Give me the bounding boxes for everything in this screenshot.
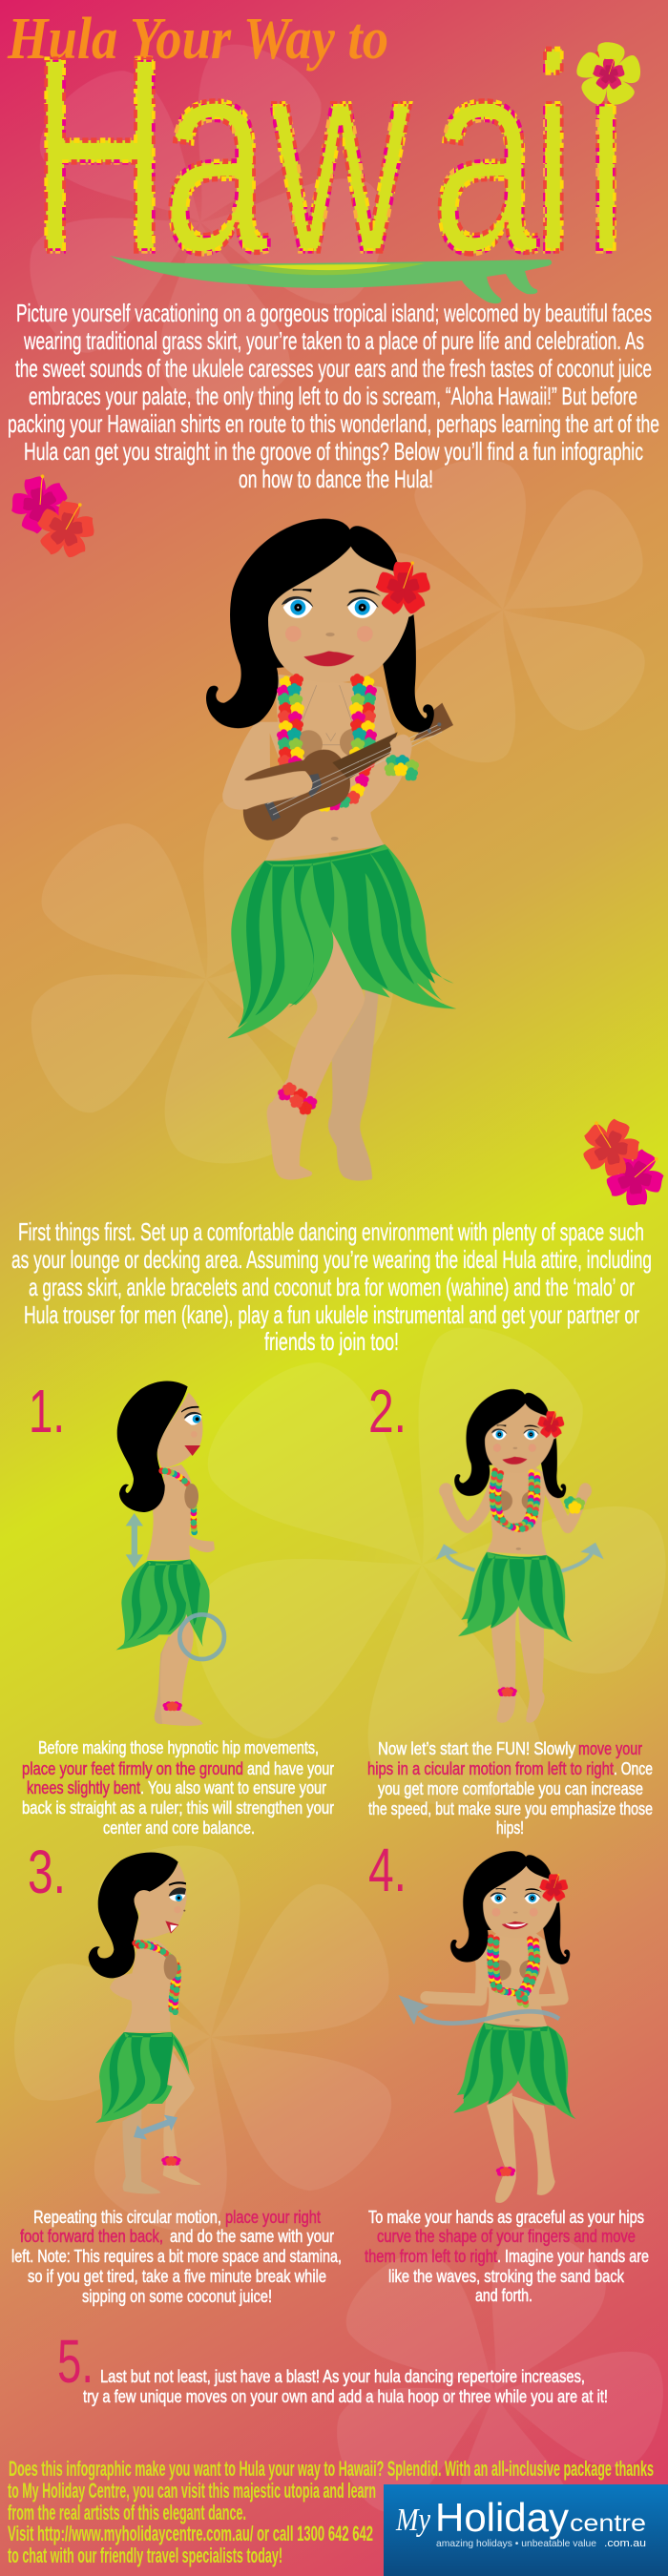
torso and arm xyxy=(110,1940,176,2032)
back leg xyxy=(328,989,379,1181)
step 4 text: them from left to right xyxy=(365,2247,497,2266)
logo: My Holiday Centre: Holiday xyxy=(435,2495,569,2540)
legs xyxy=(487,2092,555,2203)
step 4 text: and forth. xyxy=(475,2286,532,2305)
call to action text: Visit http://www.myholidaycentre.com.au/ or call 1300 642 642 xyxy=(8,2522,373,2545)
coconuts xyxy=(491,1960,540,1981)
call to action text xyxy=(8,2457,654,2567)
figure 3: side view stepping xyxy=(89,1852,201,2194)
arrow: hands left to right xyxy=(398,1995,559,2025)
arrow: up and down xyxy=(126,1513,143,1568)
coconut xyxy=(184,1484,198,1509)
skirt xyxy=(458,1552,573,1642)
step 1 text: back is straight as a ruler; this will strengthen your xyxy=(22,1798,334,1818)
ukulele headstock xyxy=(413,703,453,740)
lei xyxy=(136,1942,178,2012)
skirt xyxy=(95,2032,189,2123)
torso xyxy=(146,1465,194,1560)
paragraph: first things first xyxy=(11,1217,652,1356)
step 2 text: hips! xyxy=(496,1818,524,1838)
lei xyxy=(277,674,377,812)
grass skirt xyxy=(227,844,456,1038)
forearm xyxy=(233,771,312,809)
anklet xyxy=(278,1082,317,1114)
title: Hula Your Way to: Hula Your Way to xyxy=(7,7,388,72)
step number 3: 3. xyxy=(28,1838,66,1906)
step 1 text: center and core balance. xyxy=(103,1818,255,1838)
face xyxy=(134,1863,187,1940)
step number 5: 5. xyxy=(57,2327,94,2396)
logo: My Holiday Centre: centre xyxy=(570,2510,646,2537)
hands xyxy=(439,1483,592,1498)
upper arm xyxy=(222,722,280,810)
step 1 text: . You also want to ensure your xyxy=(140,1778,326,1797)
title: Hawaii: Hawaii xyxy=(31,0,627,311)
torso xyxy=(475,1927,549,2027)
icon: lime flower xyxy=(574,40,642,108)
bikini strings xyxy=(301,685,353,745)
step 3 text: and do the same with your xyxy=(170,2227,334,2246)
face xyxy=(157,1392,202,1468)
step 2 text: hips in a cicular motion from left to right xyxy=(367,1759,614,1778)
hand xyxy=(184,1531,215,1552)
ukulele xyxy=(243,722,442,841)
arrow: foot forward and back xyxy=(134,2115,177,2140)
step 2 text xyxy=(367,1739,653,1838)
main hula girl with ukulele xyxy=(206,519,456,1181)
step 5 text xyxy=(83,2367,608,2406)
torso xyxy=(265,675,401,861)
step 3 text: place your right xyxy=(225,2208,321,2227)
skirt xyxy=(453,2023,576,2119)
lei xyxy=(491,1938,537,2007)
icon: hibiscus pair top left xyxy=(4,469,100,563)
head xyxy=(450,1851,570,1964)
anklet xyxy=(162,1701,182,1711)
step 1 text: knees slightly bent xyxy=(27,1778,140,1797)
head xyxy=(206,519,434,733)
knee circle xyxy=(179,1614,224,1659)
navel xyxy=(516,1548,521,1550)
step 2 text: Now let’s start the FUN! Slowly xyxy=(378,1739,575,1758)
logo: My Holiday Centre xyxy=(384,2484,668,2576)
teeth smile xyxy=(505,1922,527,1927)
intro paragraph: on how to dance the Hula! xyxy=(239,465,433,493)
torso xyxy=(487,1465,547,1555)
navel xyxy=(331,837,339,841)
step 1 text xyxy=(22,1738,334,1838)
front leg xyxy=(267,928,365,1180)
hand on neck xyxy=(389,735,412,780)
call to action text: to My Holiday Centre, you can visit this majestic utopia and learn xyxy=(8,2479,376,2503)
figure 4: front view with arm sweep xyxy=(398,1851,576,2203)
step 4 text xyxy=(365,2208,649,2305)
step 3 text: foot forward then back, xyxy=(20,2227,163,2246)
logo: My Holiday Centre: My xyxy=(395,2503,431,2538)
coconut bra xyxy=(295,729,367,758)
bracelet xyxy=(564,1496,585,1514)
lei xyxy=(492,1471,537,1529)
coconut xyxy=(164,1954,177,1980)
step 3 text xyxy=(11,2208,342,2306)
call to action text: to chat with our friendly travel specialists today! xyxy=(8,2544,282,2567)
logo: My Holiday Centre: amazing holidays • unbeatable value xyxy=(436,2538,596,2549)
icon: surfboard xyxy=(110,256,552,303)
arms xyxy=(427,1948,562,2001)
lei xyxy=(162,1471,195,1534)
logo: My Holiday Centre: .com.au xyxy=(604,2538,646,2549)
navel xyxy=(514,2019,520,2022)
step 3 text: so if you get tired, take a five minute break while xyxy=(28,2267,326,2286)
intro paragraph xyxy=(8,299,659,493)
hair xyxy=(89,1852,178,1978)
arrows: hips left and right xyxy=(436,1543,604,1571)
step number 2: 2. xyxy=(368,1377,407,1445)
step 1 text: place your feet firmly on the ground xyxy=(22,1759,243,1778)
step 2 text: move your xyxy=(578,1739,642,1758)
step 1 text: Before making those hypnotic hip movements, xyxy=(38,1738,319,1757)
back leg xyxy=(122,2109,160,2194)
skirt xyxy=(116,1559,210,1650)
step 1 text: and have your xyxy=(247,1759,334,1778)
arms xyxy=(447,1477,584,1527)
anklet xyxy=(161,2156,181,2166)
step 2 text: . Once xyxy=(614,1759,653,1778)
front leg xyxy=(163,2051,201,2185)
figure 2: front view xyxy=(436,1389,604,1723)
figure 1: side view xyxy=(116,1381,224,1726)
bracelet xyxy=(385,755,419,780)
anklet xyxy=(497,1687,517,1696)
legs xyxy=(491,1608,545,1723)
coconuts xyxy=(491,1490,541,1511)
step 3 text: left. Note: This requires a bit more space and stamina, xyxy=(11,2247,342,2266)
step number 1: 1. xyxy=(29,1377,65,1445)
icon: hibiscus pair bottom right xyxy=(570,1107,668,1217)
paragraph: first things first: friends to join too! xyxy=(264,1327,399,1356)
front leg xyxy=(160,1614,203,1726)
anklet xyxy=(496,2167,515,2176)
call to action text: from the real artists of this elegant dance. xyxy=(8,2501,246,2524)
step 3 text: sipping on some coconut juice! xyxy=(82,2287,272,2306)
head xyxy=(454,1389,566,1498)
back leg xyxy=(155,1636,175,1724)
step 3 text: Repeating this circular motion, xyxy=(33,2208,221,2227)
step number 4: 4. xyxy=(368,1836,407,1904)
hair xyxy=(117,1381,188,1512)
